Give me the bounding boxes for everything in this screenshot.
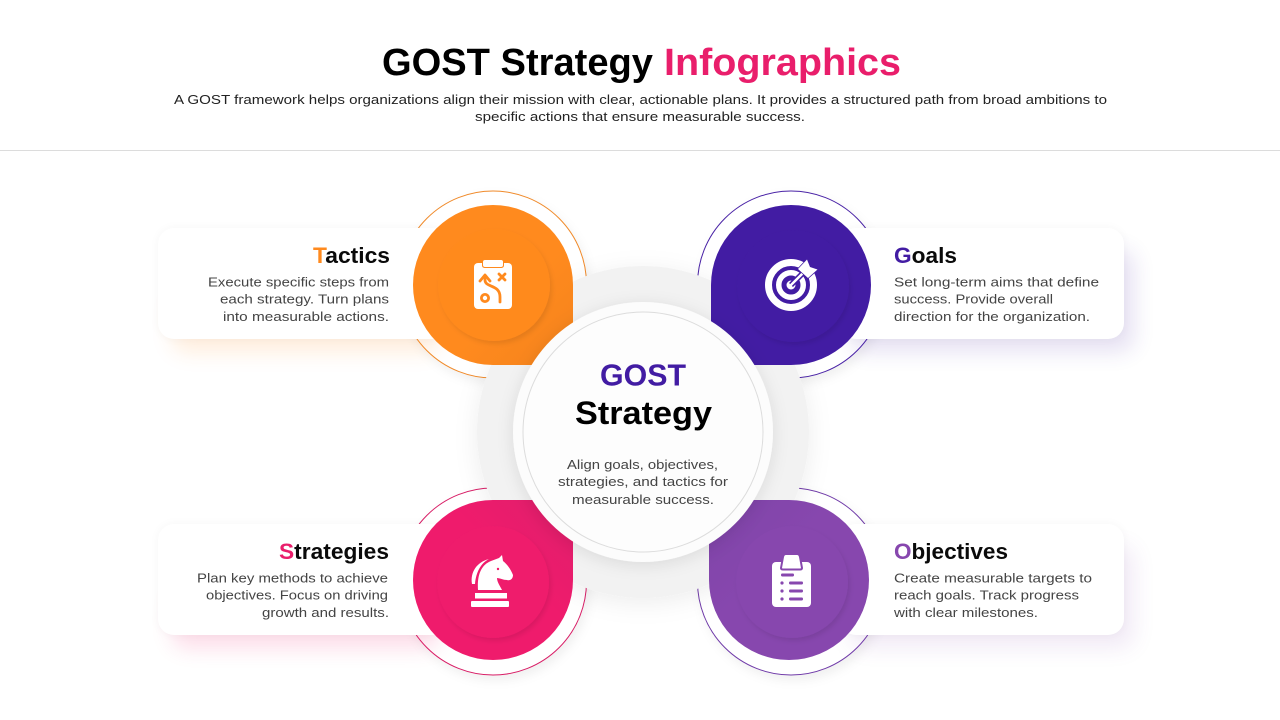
- outer ring: tactics: [400, 191, 586, 378]
- center heading: Strategy: [575, 395, 712, 431]
- panel: tactics badge: [413, 205, 573, 365]
- card: objectives: [840, 524, 1134, 648]
- outer ring: strategies: [400, 488, 586, 675]
- text block: objectives: with clear milestones.: [893, 605, 1038, 620]
- center heading: GOST: [600, 358, 686, 392]
- icon: chess knight: [471, 555, 513, 607]
- panel: strategies badge: [413, 500, 573, 660]
- text block: tactics: Execute specific steps from: [208, 274, 389, 290]
- text block: strategies: Plan key methods to achieve: [197, 570, 388, 586]
- text block: tactics: each strategy. Turn plans: [220, 292, 389, 306]
- center heading: [575, 358, 712, 431]
- panel: goals badge: [711, 205, 871, 365]
- subtitle text: [174, 92, 1107, 124]
- text block: objectives: reach goals. Track progress: [894, 588, 1079, 602]
- icon: tactics clipboard: [474, 259, 512, 309]
- text block: tactics: Tactics: [313, 243, 390, 268]
- text block: strategies: growth and results.: [262, 605, 389, 620]
- outer ring: goals: [698, 191, 884, 378]
- panel: center circle: [513, 302, 773, 562]
- icon: checklist clipboard: [772, 554, 811, 607]
- text block: tactics: into measurable actions.: [223, 309, 389, 324]
- center description: strategies, and tactics for: [558, 474, 729, 489]
- subtitle text: specific actions that ensure measurable success.: [475, 109, 805, 124]
- text block: tactics: [208, 243, 390, 324]
- center outer disc: [477, 266, 809, 598]
- title: Infographics: [664, 42, 901, 84]
- text block: goals: [894, 243, 1099, 324]
- text block: strategies: objectives. Focus on driving: [206, 588, 388, 602]
- card: strategies: [158, 524, 448, 648]
- title: [382, 42, 901, 84]
- title: GOST Strategy: [382, 42, 653, 84]
- icon: target with arrow: [768, 260, 818, 308]
- subtitle text: A GOST framework helps organizations align their mission with clear, actionable plans. It provides a structured path from broad ambitions to: [174, 92, 1107, 107]
- text block: goals: Goals: [894, 243, 957, 268]
- panel: objectives badge: [709, 500, 869, 660]
- text block: objectives: Objectives: [894, 539, 1008, 564]
- card: goals: [840, 228, 1134, 352]
- text block: goals: direction for the organization.: [894, 309, 1090, 324]
- outer ring: objectives: [698, 488, 884, 675]
- text block: objectives: Create measurable targets to: [894, 570, 1092, 586]
- text block: strategies: Strategies: [279, 539, 389, 564]
- text block: objectives: [893, 539, 1092, 620]
- text block: strategies: [197, 539, 389, 620]
- text block: goals: Set long-term aims that define: [894, 274, 1099, 290]
- center description: measurable success.: [572, 492, 714, 507]
- center description: [558, 457, 729, 507]
- center description: Align goals, objectives,: [567, 457, 718, 472]
- text block: goals: success. Provide overall: [894, 292, 1053, 306]
- card: tactics: [158, 228, 448, 352]
